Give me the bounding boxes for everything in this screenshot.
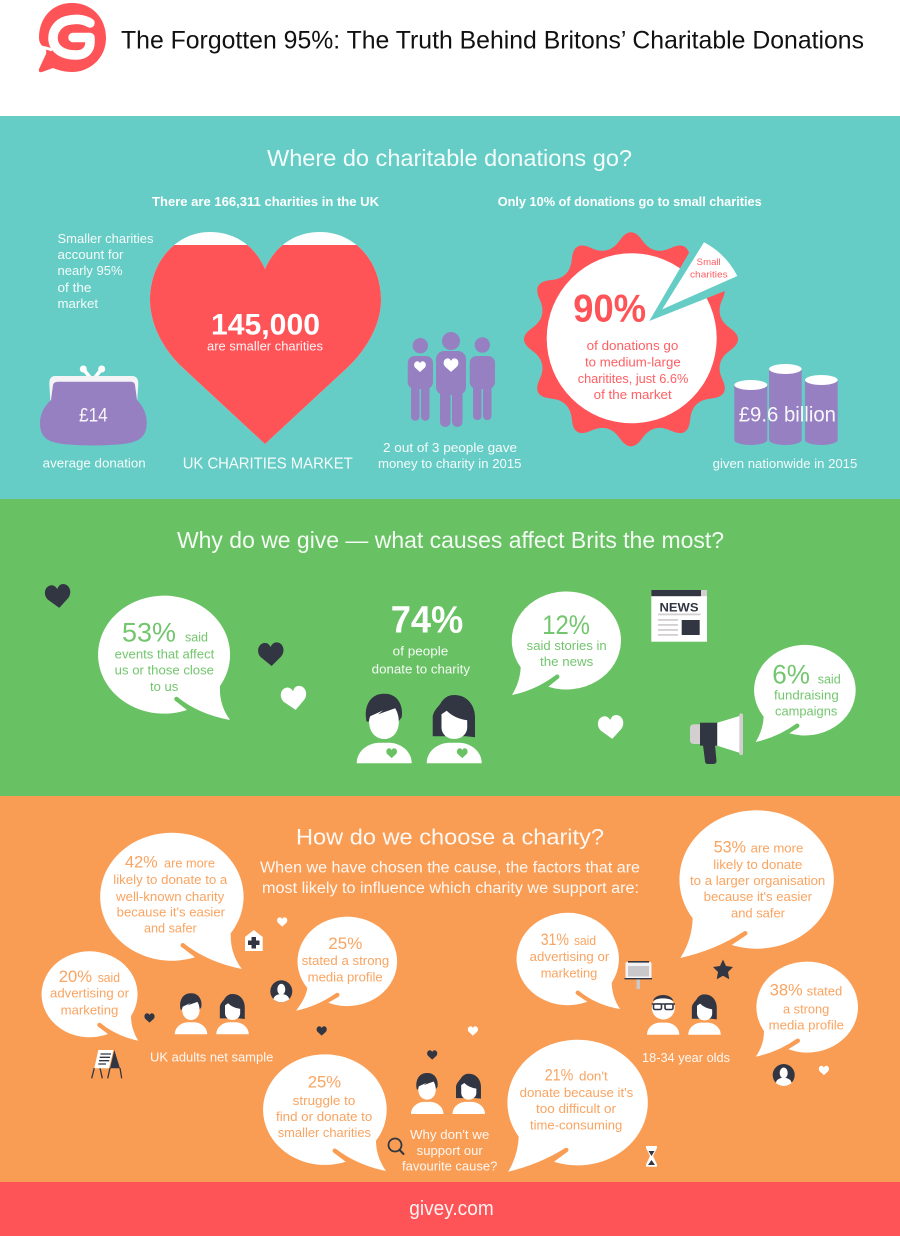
- text: smaller charities share: nearly 95%: [58, 263, 123, 278]
- footer url: givey.com: [409, 1198, 494, 1220]
- icon: 18-34 couple with glasses: [647, 994, 721, 1035]
- icon: small dark heart: [144, 1013, 155, 1023]
- text: why don't we support our favourite cause: Why don't we: [410, 1127, 489, 1142]
- speech bubble: 53% larger organisation: are more: [751, 841, 803, 856]
- label: 18-34 year olds: 18-34 year olds: [642, 1050, 730, 1065]
- heading: how do we choose a charity: How do we choose a charity?: [296, 824, 604, 849]
- speech bubble: 53% events: 53%: [122, 618, 176, 648]
- badge: 90% pie chart: charitites, just 6.6%: [578, 371, 689, 386]
- icon: A-board sign: [92, 1050, 122, 1078]
- speech bubble: 42% well-known charity: 42%: [125, 853, 158, 872]
- speech bubble: 20% advertising: said: [98, 970, 120, 985]
- heart chart: UK charities market: [150, 232, 381, 444]
- panel: where donations go: [0, 116, 900, 499]
- title: The Forgotten 95%: The Truth Behind Britons’ Charitable Donations: [121, 26, 864, 54]
- icon: stacks of coins with total: [734, 364, 838, 445]
- intro text: [260, 860, 640, 897]
- speech bubble: 53% larger organisation: to a larger organisation: [690, 873, 825, 888]
- speech bubble: 38% media profile: stated: [807, 984, 842, 999]
- text: why don't we support our favourite cause: [402, 1127, 497, 1174]
- speech bubble: 53% larger organisation: [679, 810, 834, 958]
- heading: where do charitable donations go: Where do charitable donations go?: [267, 145, 632, 171]
- speech bubble: 38% media profile: media profile: [769, 1017, 844, 1032]
- icon: avatar: [773, 1064, 795, 1086]
- speech bubble: 38% media profile: [756, 962, 858, 1057]
- text: smaller charities share: [58, 231, 154, 311]
- speech bubble: 20% advertising: marketing: [61, 1002, 118, 1017]
- badge: 90% pie chart: of donations go: [587, 338, 678, 353]
- icon: small white heart: [819, 1066, 829, 1075]
- badge: 90% pie chart: [524, 232, 750, 446]
- icon: newspaper: NEWS: [660, 600, 698, 614]
- icon: avatar: [270, 980, 292, 1002]
- speech bubble: 31% advertising: marketing: [541, 965, 597, 980]
- badge: 90% pie chart: of the market: [594, 387, 672, 402]
- speech bubble: 12% news: [512, 591, 621, 695]
- speech bubble: 42% well-known charity: likely to donate to a: [113, 872, 228, 887]
- label: given nationwide: given nationwide in 2015: [713, 456, 857, 471]
- speech bubble: 21% too difficult: 21%: [545, 1066, 573, 1085]
- icon: megaphone: [690, 714, 743, 764]
- speech bubble: 20% advertising: advertising or: [50, 986, 130, 1001]
- icon: small white heart: [468, 1026, 478, 1036]
- icon: white heart: [280, 685, 308, 712]
- speech bubble: 53% larger organisation: 53%: [714, 838, 746, 857]
- icon: small white heart: [277, 917, 287, 927]
- icon: small dark heart: [317, 1026, 327, 1036]
- panel: why do we give: [0, 499, 900, 796]
- speech bubble: 42% well-known charity: and safer: [144, 921, 197, 936]
- speech bubble: 53% events: events that affect: [115, 646, 215, 661]
- speech bubble: 53% events: to us: [150, 679, 179, 694]
- speech bubble: 31% advertising: [517, 913, 620, 1009]
- icon: stacks of coins with total: £9.6 billion: [739, 404, 836, 427]
- speech bubble: 20% advertising: [42, 951, 138, 1041]
- subheading: 166,311 charities: There are 166,311 charities in the UK: [152, 194, 380, 209]
- label: UK adults net sample: UK adults net sample: [150, 1050, 273, 1065]
- speech bubble: 53% larger organisation: likely to donate: [713, 857, 802, 872]
- icon: dark heart: [258, 642, 284, 667]
- intro text: most likely to influence which charity we support are:: [262, 880, 639, 897]
- speech bubble: 53% events: us or those close: [115, 662, 214, 677]
- speech bubble: 21% too difficult: too difficult or: [536, 1101, 617, 1116]
- stat: 74% donate to charity: [372, 600, 471, 676]
- label: average donation: average donation: [43, 456, 146, 471]
- icon: three purple people: [408, 332, 495, 427]
- speech bubble: 20% advertising: 20%: [59, 967, 92, 986]
- text: why don't we support our favourite cause: support our: [417, 1143, 483, 1158]
- speech bubble: 31% advertising: 31%: [541, 930, 569, 949]
- header band: [0, 0, 900, 116]
- speech bubble: 42% well-known charity: well-known charity: [115, 889, 225, 904]
- speech bubble: 25% struggle: 25%: [308, 1073, 341, 1092]
- text: 2 out of 3 people gave: 2 out of 3 people gave: [383, 440, 517, 455]
- icon: purse with average donation: [40, 366, 147, 446]
- speech bubble: 21% too difficult: don't: [579, 1069, 608, 1084]
- speech bubble: 53% events: said: [185, 630, 208, 645]
- stat: 74% donate to charity: 74%: [391, 600, 463, 642]
- speech bubble: 25% media profile: 25%: [328, 934, 362, 953]
- heart chart: UK charities market: 145,000: [211, 308, 320, 341]
- speech bubble: 12% news: 12%: [542, 610, 590, 640]
- badge: 90% pie chart: Small: [697, 257, 721, 268]
- speech bubble: 21% too difficult: time-consuming: [530, 1117, 622, 1132]
- text: smaller charities share: account for: [58, 247, 124, 262]
- speech bubble: 31% advertising: said: [574, 933, 596, 948]
- speech bubble: 38% media profile: 38%: [770, 981, 803, 1000]
- badge: 90% pie chart: to medium-large: [585, 355, 681, 370]
- label: UK charities market: UK CHARITIES MARKET: [183, 455, 353, 472]
- icon: hospital: [245, 930, 263, 951]
- logo: Givey speech bubble G: [38, 3, 106, 72]
- speech bubble: 53% events: [98, 596, 230, 720]
- icon: man and woman with hearts: [357, 694, 482, 763]
- speech bubble: 25% media profile: media profile: [308, 970, 383, 985]
- speech bubble: 31% advertising: advertising or: [530, 949, 610, 964]
- panel: how do we choose: [0, 796, 900, 1182]
- icon: couple: [411, 1073, 485, 1114]
- intro text: When we have chosen the cause, the factors that are: [260, 860, 640, 877]
- badge: 90% pie chart: 90%: [573, 288, 646, 331]
- speech bubble: 6% campaigns: campaigns: [775, 704, 838, 719]
- speech bubble: 25% media profile: stated a strong: [302, 953, 389, 968]
- icon: small dark heart: [427, 1050, 437, 1060]
- subheading: only 10% to small charities: Only 10% of donations go to small charities: [498, 194, 762, 209]
- text: smaller charities share: of the: [58, 280, 92, 295]
- stat: 74% donate to charity: of people: [393, 644, 448, 659]
- footer band: [0, 1182, 900, 1236]
- heading: why do we give: Why do we give — what causes affect Brits the most?: [177, 527, 724, 553]
- text: smaller charities share: Smaller charities: [58, 231, 154, 246]
- text: why don't we support our favourite cause: favourite cause?: [402, 1159, 497, 1174]
- icon: purse with average donation: £14: [79, 406, 108, 427]
- speech bubble: 25% struggle: find or donate to: [276, 1109, 372, 1124]
- speech bubble: 6% campaigns: fundraising: [774, 687, 839, 702]
- speech bubble: 25% struggle: smaller charities: [278, 1125, 371, 1140]
- icon: white heart: [597, 714, 625, 740]
- icon: magnifying glass: [388, 1138, 404, 1154]
- icon: dark heart: [44, 583, 72, 609]
- speech bubble: 25% struggle: [263, 1054, 387, 1171]
- speech bubble: 12% news: the news: [540, 654, 594, 669]
- speech bubble: 6% campaigns: [754, 645, 856, 742]
- speech bubble: 42% well-known charity: because it's easier: [117, 905, 226, 920]
- speech bubble: 38% media profile: a strong: [783, 1001, 829, 1016]
- speech bubble: 6% campaigns: said: [818, 671, 841, 686]
- speech bubble: 6% campaigns: 6%: [772, 659, 810, 689]
- speech bubble: 42% well-known charity: are more: [164, 856, 215, 871]
- speech bubble: 21% too difficult: [507, 1040, 648, 1172]
- speech bubble: 53% larger organisation: because it's easier: [704, 889, 813, 904]
- icon: billboard: [624, 961, 652, 989]
- text: 2 out of 3 people gave: money to charity in 2015: [378, 456, 522, 471]
- badge: 90% pie chart: charities: [690, 270, 728, 281]
- stat: 74% donate to charity: donate to charity: [372, 661, 471, 676]
- speech bubble: 42% well-known charity: [100, 833, 244, 969]
- speech bubble: 25% media profile: [296, 917, 397, 1011]
- icon: star: [713, 960, 733, 979]
- text: 2 out of 3 people gave: [378, 440, 522, 471]
- heart chart: UK charities market: are smaller charities: [207, 339, 323, 354]
- icon: newspaper: [651, 590, 707, 642]
- speech bubble: 25% struggle: struggle to: [293, 1093, 355, 1108]
- icon: hourglass: [646, 1146, 657, 1167]
- text: smaller charities share: market: [58, 296, 98, 311]
- speech bubble: 12% news: said stories in: [527, 638, 607, 653]
- speech bubble: 21% too difficult: donate because it's: [520, 1085, 634, 1100]
- icon: UK adults couple: [175, 993, 249, 1034]
- speech bubble: 53% larger organisation: and safer: [731, 906, 786, 921]
